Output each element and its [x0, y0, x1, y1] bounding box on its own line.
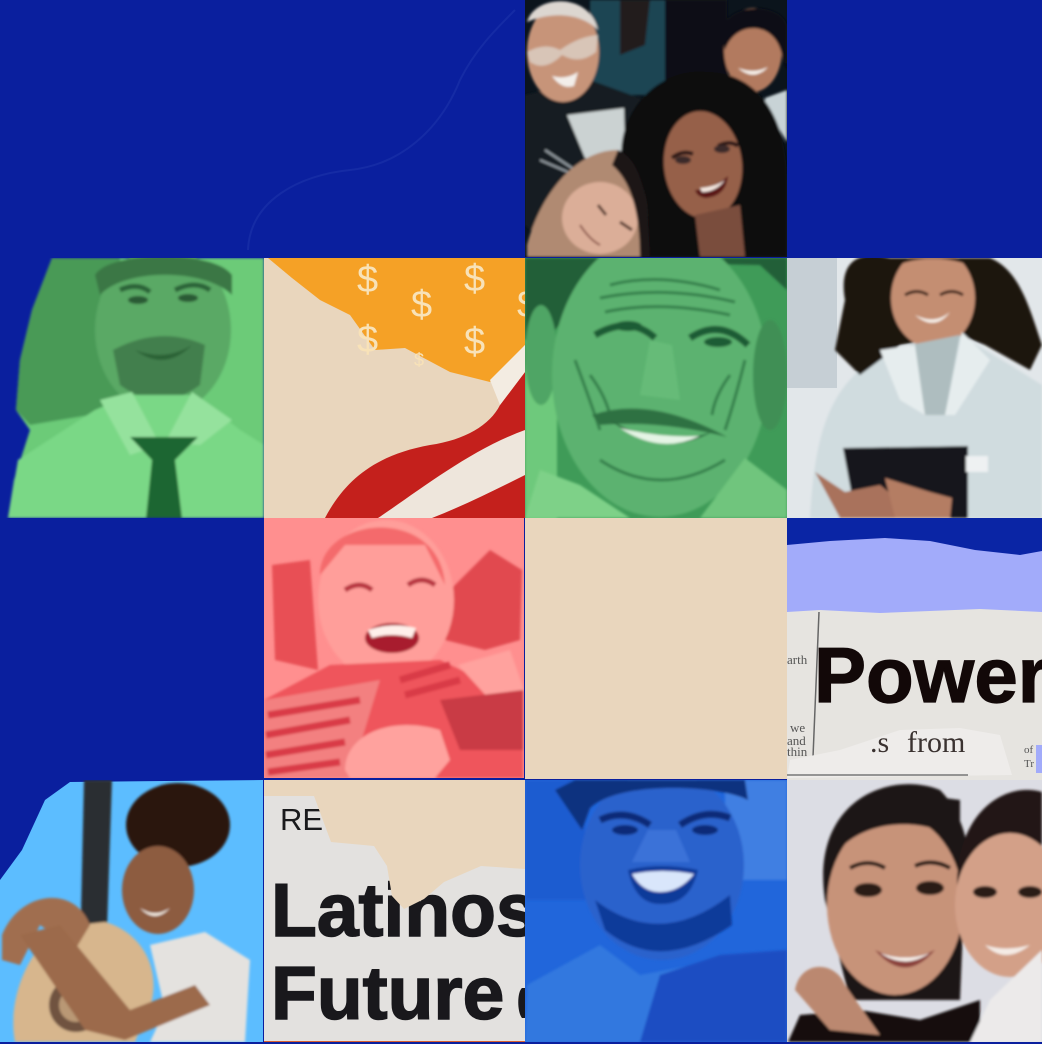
photo: blue man smiling — [525, 770, 787, 1042]
panel: torn paper with dollars and flag — [264, 258, 538, 518]
cream torn paper — [264, 780, 525, 909]
small column text: thin — [787, 744, 808, 759]
panel: plain cream square — [525, 518, 787, 779]
small heading: RE — [280, 802, 323, 837]
small column text: we — [790, 720, 805, 735]
dollar signs: $ — [357, 319, 378, 361]
panel: newspaper Latinos Future: Future — [271, 951, 504, 1035]
small column text: arth — [787, 652, 808, 667]
small column text — [787, 652, 808, 759]
dollar signs: $ — [464, 321, 485, 363]
jacket detail — [540, 150, 575, 172]
dollar signs: $ — [411, 284, 432, 326]
vertical rule — [813, 612, 819, 757]
panel: newspaper Power: Tr — [1024, 758, 1034, 770]
panel: newspaper Power: of — [1024, 744, 1034, 756]
dollar signs: $ — [414, 350, 424, 370]
panel: newspaper Power — [787, 518, 1042, 780]
photo: group of women — [525, 0, 787, 257]
decorative faint line — [248, 10, 515, 250]
torn lower paper with word — [787, 728, 1012, 778]
dollar signs — [357, 262, 525, 367]
photo: green older man — [525, 233, 787, 520]
photo: girl with guitar — [0, 780, 263, 1042]
panel: newspaper Power: .s — [870, 726, 889, 759]
dollar signs: $ — [517, 284, 538, 326]
wrinkles — [575, 280, 745, 480]
small column text: and — [787, 733, 806, 748]
panel: newspaper Latinos Future — [264, 780, 538, 1044]
photo: doctor with tablet — [787, 248, 1042, 518]
periwinkle torn paper — [787, 538, 1042, 613]
newspaper clipping — [787, 609, 1042, 780]
orange strip — [264, 1041, 525, 1042]
american flag — [325, 372, 525, 518]
dollar signs: $ — [357, 259, 378, 301]
headline: Power — [814, 631, 1042, 719]
photo: mother and daughter — [787, 780, 1042, 1042]
photo: red laughing boy — [264, 518, 524, 778]
dollar signs: $ — [464, 258, 485, 300]
headline: Latinos — [271, 868, 538, 952]
panel: newspaper Power: from — [907, 726, 965, 759]
orange torn money paper — [268, 258, 525, 382]
photo: green man with tie — [0, 246, 264, 518]
